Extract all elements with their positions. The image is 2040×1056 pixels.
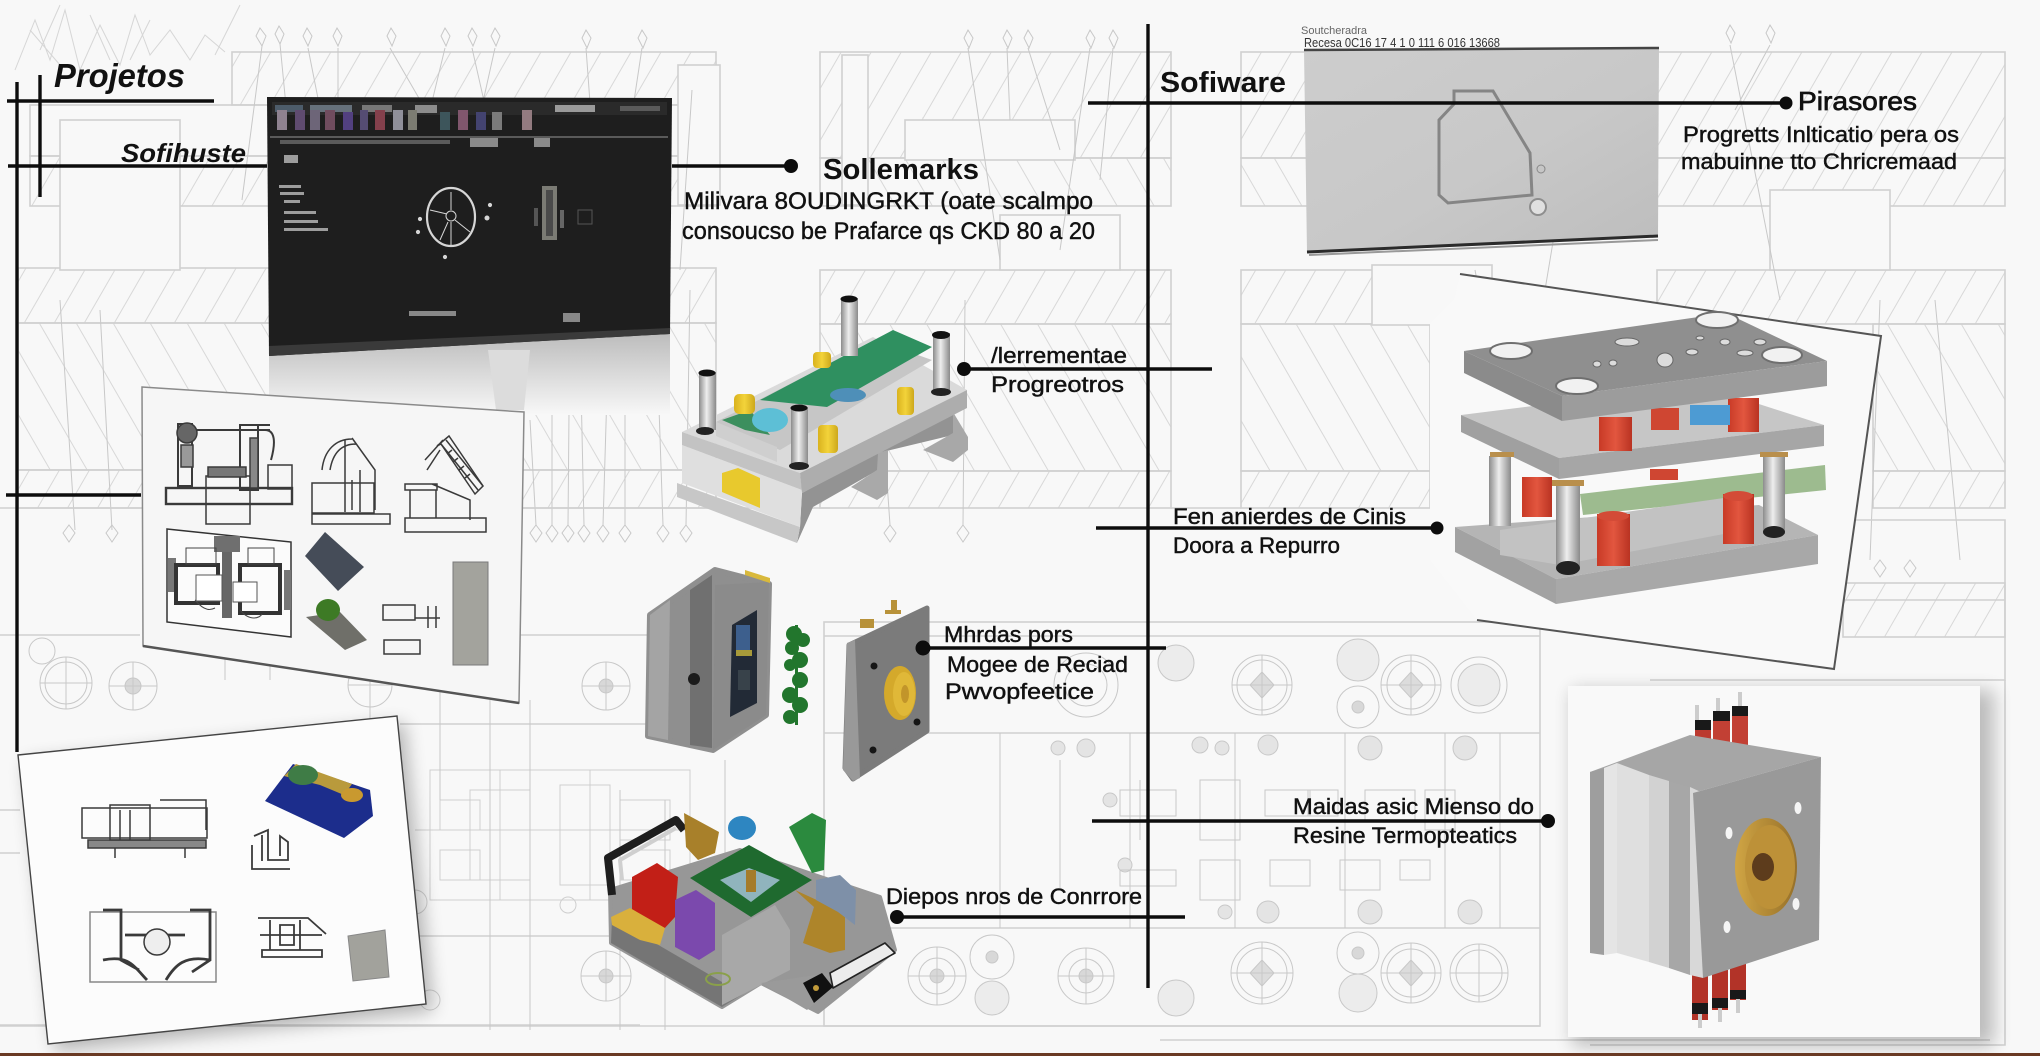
render: blue component xyxy=(265,764,373,838)
sketch: small bracket xyxy=(252,830,290,869)
red cylinders xyxy=(1597,398,1759,566)
description: Sollemarks: Milivara 8OUDINGRKT (oate scalmpo xyxy=(684,188,1093,215)
label: Maidas: Maidas asic Mienso do xyxy=(1293,794,1534,819)
green box xyxy=(789,813,826,873)
description: Sollemarks xyxy=(682,188,1095,245)
bottom edge strip xyxy=(0,1053,2040,1056)
heading: Projetos: Projetos xyxy=(54,57,185,94)
label: Mhrdas pors xyxy=(944,622,1128,704)
sketch: inclined press xyxy=(405,436,486,532)
green board xyxy=(1580,465,1826,515)
circular parts, lower rows xyxy=(29,638,1508,1016)
monitor CAD section xyxy=(409,186,592,322)
label: Fen anierdes: Doora a Repurro xyxy=(1173,533,1340,558)
plate caption: Recesa 0C16 17 4 1 0 111 6 016 13668 xyxy=(1304,35,1500,50)
gold bush xyxy=(884,666,916,720)
monitor toolbar xyxy=(272,102,667,115)
description: Pirasores: Progretts Inlticatio pera os xyxy=(1683,122,1959,147)
sketch: data tile xyxy=(348,930,389,981)
connector lines xyxy=(6,24,1786,988)
blue part xyxy=(728,816,756,840)
sketch: dense assembly plan xyxy=(167,529,291,637)
green leaf component xyxy=(782,625,810,725)
description: Pirasores: mabuinne tto Chricremaad xyxy=(1681,149,1957,174)
control box screen xyxy=(730,610,757,717)
red block xyxy=(632,863,678,930)
label: Fen anierdes xyxy=(1173,504,1406,558)
panel: second drawing sheet xyxy=(18,716,433,1051)
right foot xyxy=(923,412,968,462)
middle plate xyxy=(1461,385,1824,479)
device logo xyxy=(706,973,730,985)
device grey base xyxy=(610,850,895,1012)
monitor bottom bar xyxy=(269,328,670,356)
faint centre mechanism sketch xyxy=(403,770,700,1010)
control box with screen xyxy=(648,570,770,750)
monitor side list xyxy=(279,155,328,231)
front handle xyxy=(761,943,895,1010)
sketch: arch assembly xyxy=(312,438,390,524)
red heater rods top xyxy=(1695,692,1748,780)
sketch: press unit xyxy=(258,918,326,957)
mould side stripes xyxy=(1590,763,1703,978)
device black handle xyxy=(608,820,684,895)
sketch: data plate xyxy=(453,562,488,665)
heading: Sollemarks: Sollemarks xyxy=(823,154,979,186)
top plate surface xyxy=(682,337,967,473)
plate bolts xyxy=(870,662,920,754)
render: green part xyxy=(306,599,367,650)
label: Mhrdas pors: Mhrdas pors xyxy=(944,622,1073,647)
panel: CAD monitor xyxy=(267,97,672,356)
control box screw xyxy=(688,673,700,685)
sketch: gantry machine xyxy=(166,423,292,524)
mould plate with gold bush xyxy=(843,600,927,781)
die front face xyxy=(682,445,802,527)
base underside band xyxy=(797,412,953,543)
label: Fen anierdes: Fen anierdes de Cinis xyxy=(1173,504,1406,529)
gold disc xyxy=(1735,818,1797,916)
label: Sofihuste: Sofihuste xyxy=(121,138,246,168)
hatched mould sections, upper rows xyxy=(18,52,2005,637)
mould top face xyxy=(1590,735,1821,793)
bracket knob xyxy=(1530,165,1546,215)
plate caption: Soutcheradra xyxy=(1301,25,1368,37)
panel: technical drawing sheet xyxy=(142,387,524,703)
yellow insert xyxy=(722,468,760,508)
monitor stand reflection xyxy=(269,328,670,415)
heading: Pirasores: Pirasores xyxy=(1798,86,1917,116)
label: Maidas: Resine Termopteatics xyxy=(1293,823,1517,848)
description: Pirasores xyxy=(1681,122,1959,174)
label: Mhrdas pors: Pwvopfeetice xyxy=(945,679,1094,704)
label: Maidas xyxy=(1293,794,1534,848)
render: dark navy part xyxy=(305,532,364,591)
panel: tilted white sheet behind die set xyxy=(1430,274,1881,669)
green frame xyxy=(690,845,812,917)
connector dots xyxy=(784,96,1792,924)
gold block front xyxy=(795,890,845,953)
sketch: base assembly xyxy=(82,800,207,858)
grey inner block xyxy=(1500,495,1745,565)
label: Mhrdas pors: Mogee de Reciad xyxy=(947,652,1128,677)
top plate xyxy=(1464,312,1827,421)
back pillars and red part xyxy=(1489,456,1552,526)
guide pillars xyxy=(1490,452,1788,575)
small progressive die xyxy=(677,296,968,543)
green circuit board xyxy=(722,330,932,435)
label: Ferramentas progressivos: Progreotros xyxy=(991,372,1124,397)
card soft shadow xyxy=(1572,690,1994,1046)
mould front face xyxy=(1693,757,1821,978)
control device assembly xyxy=(608,813,895,1012)
guide pillars xyxy=(696,296,951,470)
blue-grey bracket xyxy=(816,875,856,925)
grid frames, lower half xyxy=(0,508,2005,1045)
gold block rear xyxy=(684,813,719,860)
yellow cylinders xyxy=(734,352,914,453)
label: Ferramentas progressivos xyxy=(991,343,1127,397)
die front foot xyxy=(677,483,800,543)
label: Diepos: Diepos nros de Conrrore xyxy=(886,884,1142,909)
bracket outline xyxy=(1439,91,1532,203)
monitor CAD wheel xyxy=(416,188,492,259)
purple block xyxy=(675,890,715,960)
leader lines with drop markers, top xyxy=(60,25,1960,577)
middle foot xyxy=(851,450,888,500)
mould holes xyxy=(1724,802,1802,933)
lower plate xyxy=(1455,505,1818,604)
red heater rods bottom xyxy=(1692,960,1746,1028)
large die set xyxy=(1455,312,1827,604)
top fittings xyxy=(860,600,901,628)
description: Sollemarks: consoucso be Prafarce qs CKD 80 a 20 xyxy=(682,218,1095,245)
faint sketch scribbles top-left xyxy=(15,5,240,70)
upper block xyxy=(716,340,932,450)
monitor thumbnail row xyxy=(277,110,532,130)
monitor menu strip xyxy=(270,136,668,147)
plate caption xyxy=(1301,25,1500,50)
panel: silver plate with bracket xyxy=(1301,25,1659,255)
gold small block xyxy=(611,908,665,945)
panel: hot-runner mould card xyxy=(1568,686,1994,1046)
label: Ferramentas progressivos: /lerrementae xyxy=(991,343,1127,368)
sketch: small parts xyxy=(383,605,440,654)
heading: Sofiware: Sofiware xyxy=(1160,67,1286,99)
sketch: ornate mould xyxy=(90,910,216,982)
